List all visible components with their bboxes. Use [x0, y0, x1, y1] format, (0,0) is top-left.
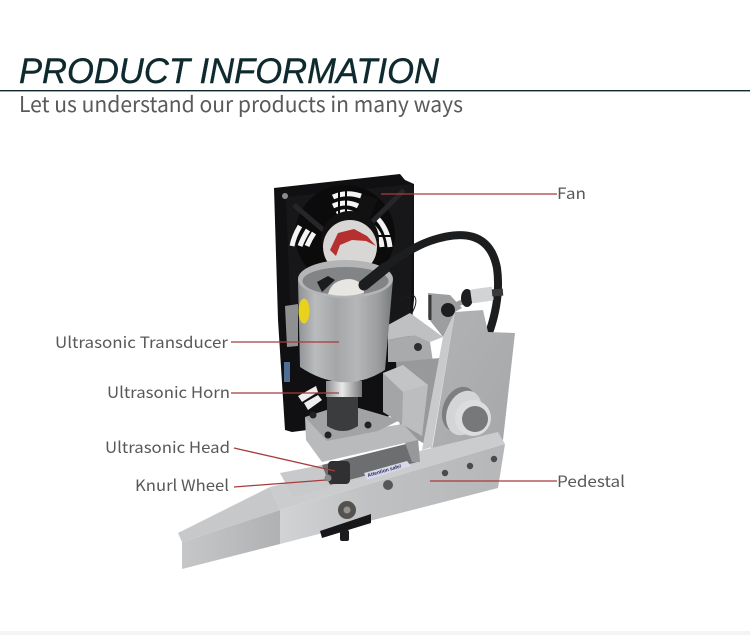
cylinder rim: [298, 260, 393, 298]
lower fan slots: [298, 386, 322, 410]
fan hub: [321, 211, 379, 269]
bottom strip: [0, 631, 750, 635]
title: PRODUCT INFORMATION: [19, 51, 439, 91]
support arm: [388, 313, 443, 362]
fan opening: [295, 185, 395, 285]
screw: [282, 193, 288, 199]
block front: [305, 417, 418, 462]
dark wire: [317, 276, 335, 292]
label: ultrasonic horn: Ultrasonic Horn: [107, 381, 230, 403]
upright plate: [422, 287, 515, 450]
red logo star: [330, 229, 376, 256]
holes: [383, 480, 393, 490]
block top: [305, 404, 400, 441]
arm bolt: [414, 343, 422, 351]
back fan frame: [274, 174, 414, 432]
cable: [360, 235, 498, 330]
cylinder inside: [302, 267, 388, 295]
T-bracket: [320, 514, 371, 538]
leader: knurl wheel: [234, 480, 326, 487]
ultrasonic head: [328, 461, 350, 484]
screw: [340, 530, 349, 541]
heading rule: [0, 90, 750, 91]
ultrasonic horn: [326, 381, 362, 431]
sanitary fitting: [436, 382, 482, 436]
label: ultrasonic transducer: Ultrasonic Transducer: [55, 331, 229, 353]
side strip: [422, 312, 455, 450]
recess: [322, 443, 417, 485]
body top: [270, 432, 505, 510]
machine illustration: [178, 174, 515, 569]
mount screws: [310, 412, 316, 418]
label: ultrasonic head: Ultrasonic Head: [105, 436, 230, 458]
pedestal: [178, 432, 505, 569]
fan blade: [355, 194, 378, 222]
leader: fan: [381, 193, 557, 195]
label: pedestal: Pedestal: [557, 470, 625, 492]
front fan frame: [286, 184, 414, 330]
labels: [55, 182, 625, 496]
fan grille slots: [292, 194, 390, 247]
leader lines: [231, 194, 557, 487]
fan struts: [294, 190, 404, 240]
backing behind block: [396, 358, 440, 448]
white wiring: [328, 279, 364, 296]
top bevel: [178, 487, 280, 542]
leader: ultrasonic head: [234, 448, 335, 471]
long body front: [280, 444, 505, 544]
roller: [338, 501, 356, 519]
horn dark body: [327, 395, 358, 431]
cylinder body: [298, 279, 393, 382]
label: knurl wheel: Knurl Wheel: [135, 474, 229, 496]
plate: [280, 455, 420, 497]
yellow sticker: [298, 298, 310, 324]
clamp collar: [461, 289, 473, 307]
arm top face: [388, 313, 443, 342]
bracket: [428, 293, 462, 337]
bracket dark edge: [428, 295, 432, 320]
arm front: [388, 335, 433, 362]
fan assembly: [274, 174, 414, 432]
grille ribs: [339, 190, 392, 236]
mounting strip on fan: [285, 304, 298, 347]
lower block top: [383, 365, 428, 392]
clamp knob: [441, 303, 455, 317]
label: fan: Fan: [557, 182, 586, 204]
leader: pedestal: [430, 480, 557, 482]
tapered tip: [182, 510, 280, 569]
cable end: [364, 268, 385, 285]
subtitle: Let us understand our products in many ways: [19, 88, 463, 119]
leader: ultrasonic horn: [231, 392, 339, 394]
lower block: [383, 367, 427, 436]
blue fan sticker: [284, 362, 290, 382]
front face: [432, 310, 515, 450]
knurl wheel: [324, 474, 332, 482]
clamp cylinder: [470, 287, 494, 303]
warning label text: Attention safe!: [367, 463, 403, 479]
wires: [400, 295, 416, 318]
transducer cylinder: [298, 260, 393, 382]
recess plate: [280, 438, 420, 497]
fan hub label: [323, 220, 377, 274]
horn collar: [326, 381, 362, 397]
clamp end: [492, 289, 503, 296]
leader: ultrasonic transducer: [231, 341, 339, 343]
clamp shaft: [455, 299, 470, 305]
upper wall: [404, 438, 420, 462]
horn mount block: [305, 404, 418, 462]
